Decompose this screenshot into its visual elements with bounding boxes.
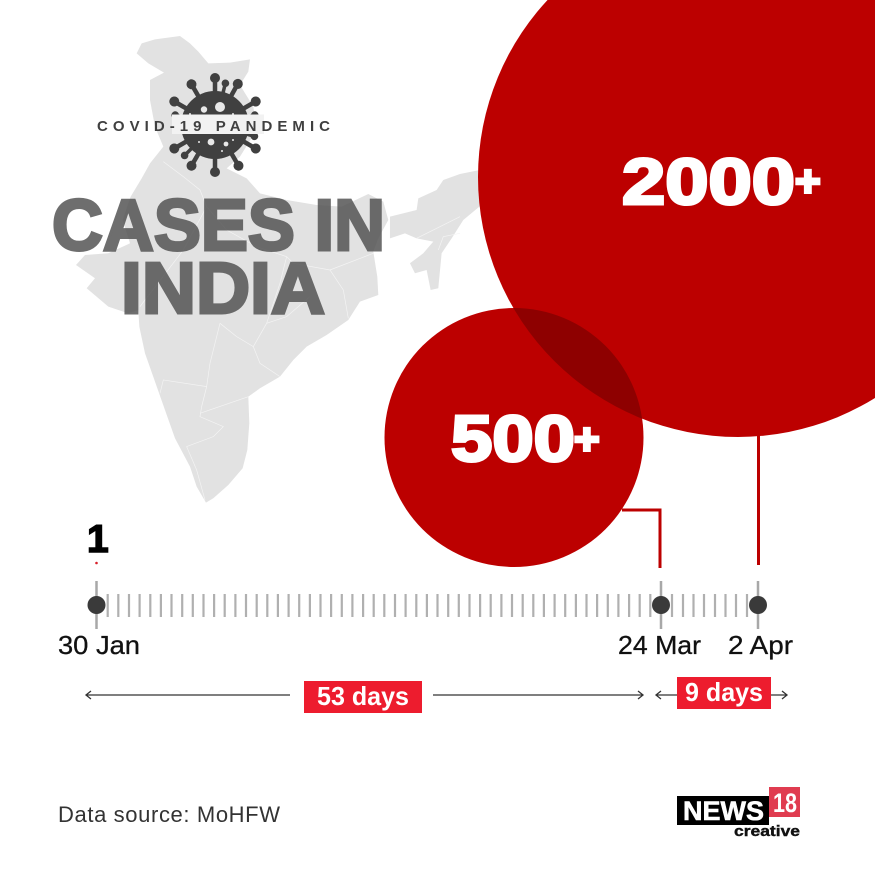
logo: News18 creative: 18 xyxy=(773,788,797,818)
span: 53 days xyxy=(86,681,643,713)
logo: News18 creative xyxy=(677,787,800,840)
title: CASES IN xyxy=(52,186,385,266)
subtitle with white band: COVID-19 PANDEMIC xyxy=(97,118,330,135)
circle: 500+ cases: 500 xyxy=(451,402,575,475)
date: 24 Mar: 24 Mar xyxy=(618,630,701,660)
circle: 2000+ cases xyxy=(478,0,875,437)
date: 30 Jan: 30 Jan xyxy=(58,630,140,660)
circle: 2000+ cases: + xyxy=(795,157,821,206)
span: 9 days: 9 days xyxy=(685,677,763,707)
circle: 2000+ cases: 2000 xyxy=(622,145,795,218)
circle: 500+ cases: + xyxy=(574,415,600,464)
connector: 500+ to 24 Mar xyxy=(622,510,660,568)
logo: News18 creative: creative xyxy=(734,823,800,840)
data source: Data source: MoHFW xyxy=(58,802,280,827)
logo: News18 creative: NEWS xyxy=(683,796,764,826)
span: 9 days xyxy=(656,677,787,709)
span: 53 days: 53 days xyxy=(317,681,409,711)
timeline xyxy=(88,581,767,629)
circle: 500+ cases xyxy=(384,308,644,567)
title xyxy=(52,186,385,329)
title: INDIA xyxy=(121,249,325,329)
map of India xyxy=(76,36,483,503)
connector: 2000+ to 2 Apr xyxy=(757,436,760,565)
label: 1 case: 1 xyxy=(87,518,109,561)
virus icon xyxy=(167,73,263,177)
date: 2 Apr: 2 Apr xyxy=(728,630,793,660)
